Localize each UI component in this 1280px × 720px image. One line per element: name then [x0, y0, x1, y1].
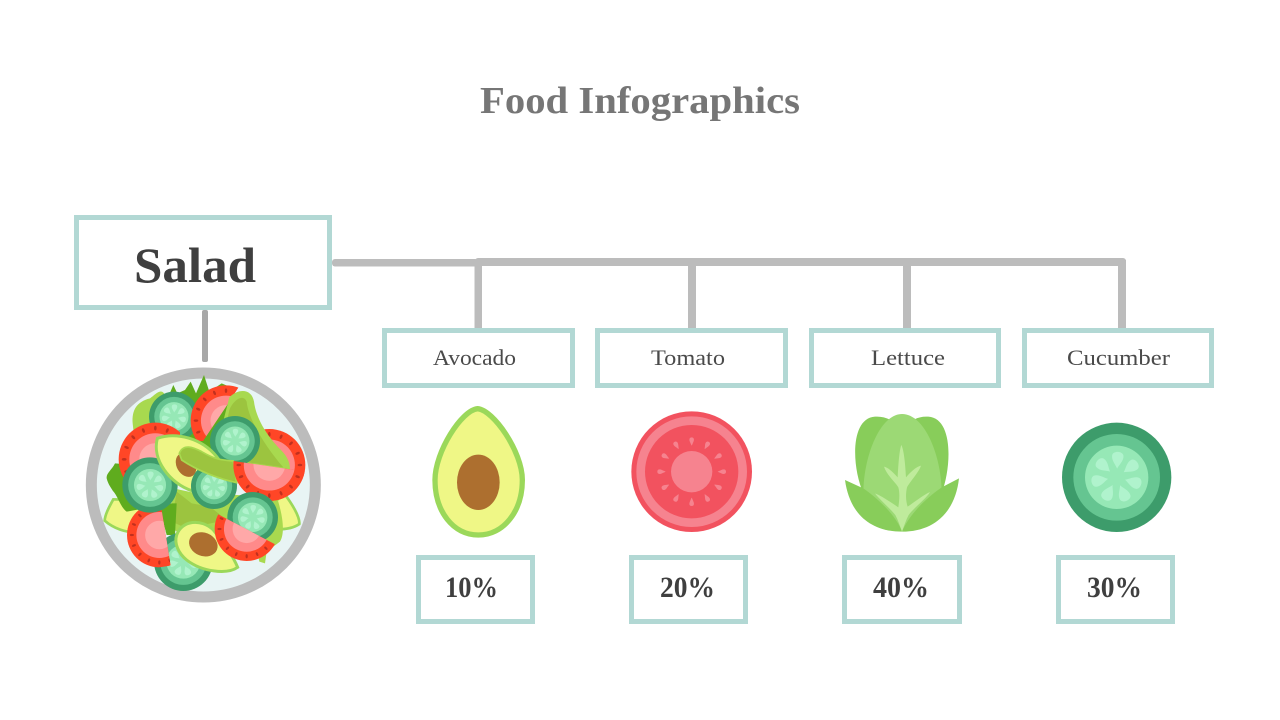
- tomato slice, top: [190, 385, 238, 441]
- heading box: Salad: [76, 218, 330, 308]
- heading box: Salad: Salad: [134, 237, 256, 293]
- tomato, right back half: [233, 429, 305, 501]
- tomato slice, lower right: [214, 514, 275, 561]
- avocado slice, lower: [176, 522, 238, 571]
- label box: Lettuce: [812, 330, 998, 386]
- avocado slice, upper: [156, 436, 233, 491]
- icon: cucumber: [1062, 423, 1171, 532]
- connector lines: [332, 258, 1126, 328]
- value box: Cucumber 30%: 30%: [1087, 571, 1142, 604]
- icon: avocado: [435, 409, 522, 535]
- tomato, right front half: [233, 461, 305, 501]
- value box: Lettuce 40%: 40%: [873, 571, 929, 604]
- cucumber, bottom: [154, 532, 213, 591]
- icon: tomato: [631, 411, 752, 532]
- label box: Lettuce: Lettuce: [871, 345, 945, 370]
- value box: Lettuce 40%: [844, 558, 960, 622]
- icon: salad bowl: [91, 373, 315, 597]
- label box: Tomato: [598, 330, 786, 386]
- value box: Avocado 10%: [418, 558, 532, 622]
- label box: Cucumber: Cucumber: [1067, 345, 1171, 370]
- title: Food Infographics: [480, 80, 800, 122]
- label box: Avocado: Avocado: [433, 345, 516, 370]
- value box: Cucumber 30%: [1058, 558, 1172, 622]
- tomato slice, left: [118, 422, 180, 478]
- label box: Tomato: Tomato: [651, 345, 725, 370]
- icon: lettuce: [845, 414, 959, 532]
- value box: Avocado 10%: 10%: [445, 571, 498, 604]
- label box: Avocado: [384, 330, 572, 386]
- tomato slice, lower left: [127, 510, 170, 568]
- value box: Tomato 20%: [632, 558, 746, 622]
- connector: salad to bowl: [202, 310, 208, 362]
- lettuce leaf over avocado: [179, 447, 237, 483]
- label box: Cucumber: [1024, 330, 1212, 386]
- value box: Tomato 20%: 20%: [660, 571, 715, 604]
